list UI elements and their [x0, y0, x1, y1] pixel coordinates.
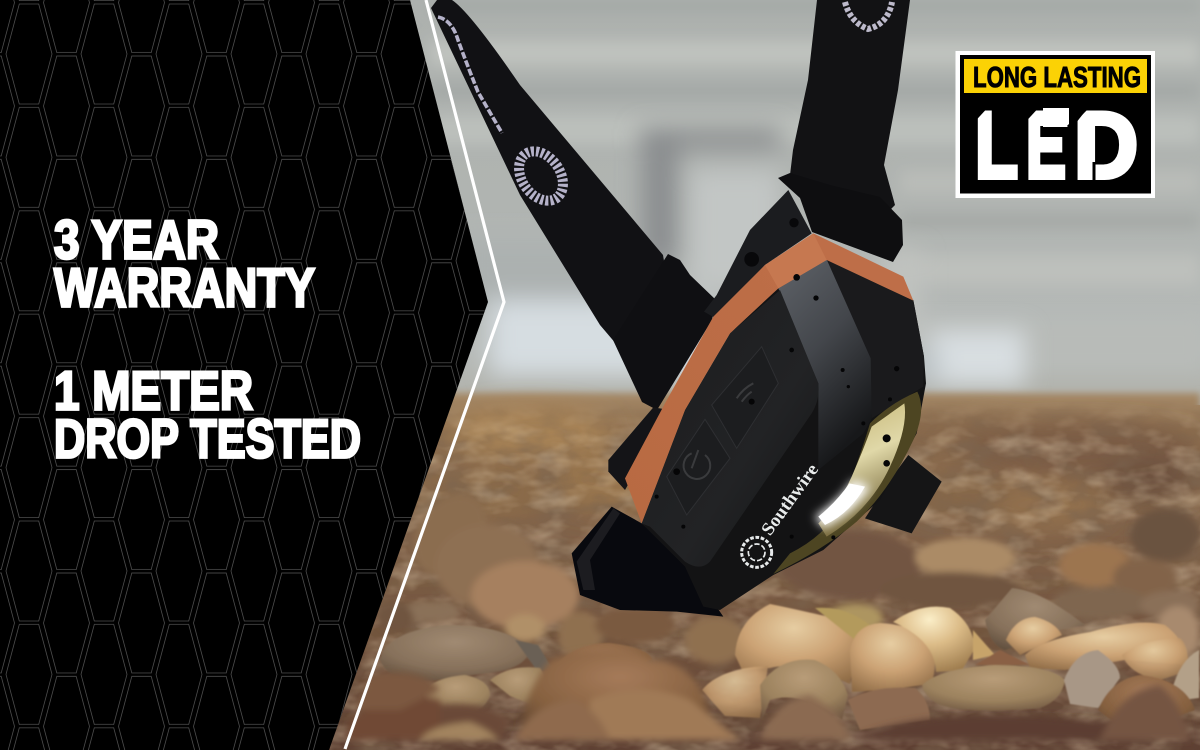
strap logo top: [845, 2, 892, 29]
mode symbol: [737, 383, 753, 402]
body shell: [642, 258, 926, 610]
right elastic sleeve: [778, 173, 903, 262]
power button: [667, 419, 730, 515]
badge LED wordmark: L: [975, 92, 1018, 198]
brand text: Southwire: [757, 460, 822, 539]
headlamp product: [431, 0, 942, 617]
left strap: [431, 0, 668, 345]
3 year warranty: [54, 208, 315, 318]
left elastic sleeve: [613, 254, 716, 410]
badge LED wordmark: E: [1026, 92, 1066, 198]
mid-distance blurred stones: [377, 481, 1200, 664]
water droplets: [655, 274, 899, 539]
lens crescent: [773, 392, 921, 574]
power symbol: [684, 450, 710, 479]
headline text: warranty and drop test: [54, 208, 361, 470]
matte front face with buttons: [642, 290, 819, 567]
1 meter drop tested: 1 METER: [54, 360, 253, 422]
brand logo: [742, 537, 772, 567]
white chevron outline: [345, 0, 504, 749]
right bevel: [827, 259, 924, 418]
distant blurred gravel: [450, 406, 1200, 540]
grey lit facet: [778, 259, 872, 470]
mode button: [712, 347, 778, 448]
right strap: [790, 0, 910, 240]
3 year warranty: 3 YEAR: [54, 208, 219, 270]
rear bracket: [608, 407, 670, 490]
badge: long lasting LED: [956, 51, 1155, 198]
photo: gravel ground: [329, 387, 1200, 750]
1 meter drop tested: DROP TESTED: [54, 408, 361, 470]
3 year warranty: WARRANTY: [54, 256, 315, 318]
badge LED wordmark: D: [1074, 92, 1138, 198]
strap woven logo: [438, 17, 572, 209]
orange band: [625, 233, 913, 523]
lamp assembly drawn in local coordinates: [572, 190, 942, 617]
badge caption: LONG LASTING: [973, 62, 1141, 94]
photo: blurred wall background: [0, 0, 1200, 410]
upper bracket: [704, 190, 812, 318]
rear tab: [865, 455, 942, 533]
in-focus lit stones: [380, 588, 1199, 735]
foreground out-of-focus stones: [345, 650, 1190, 740]
rear strap pad: [572, 507, 723, 617]
mottled gravel texture: [330, 400, 1200, 750]
black chevron panel with hex pattern: [0, 0, 488, 750]
badge LED wordmark: [968, 92, 1138, 198]
1 meter drop tested: [54, 360, 361, 470]
